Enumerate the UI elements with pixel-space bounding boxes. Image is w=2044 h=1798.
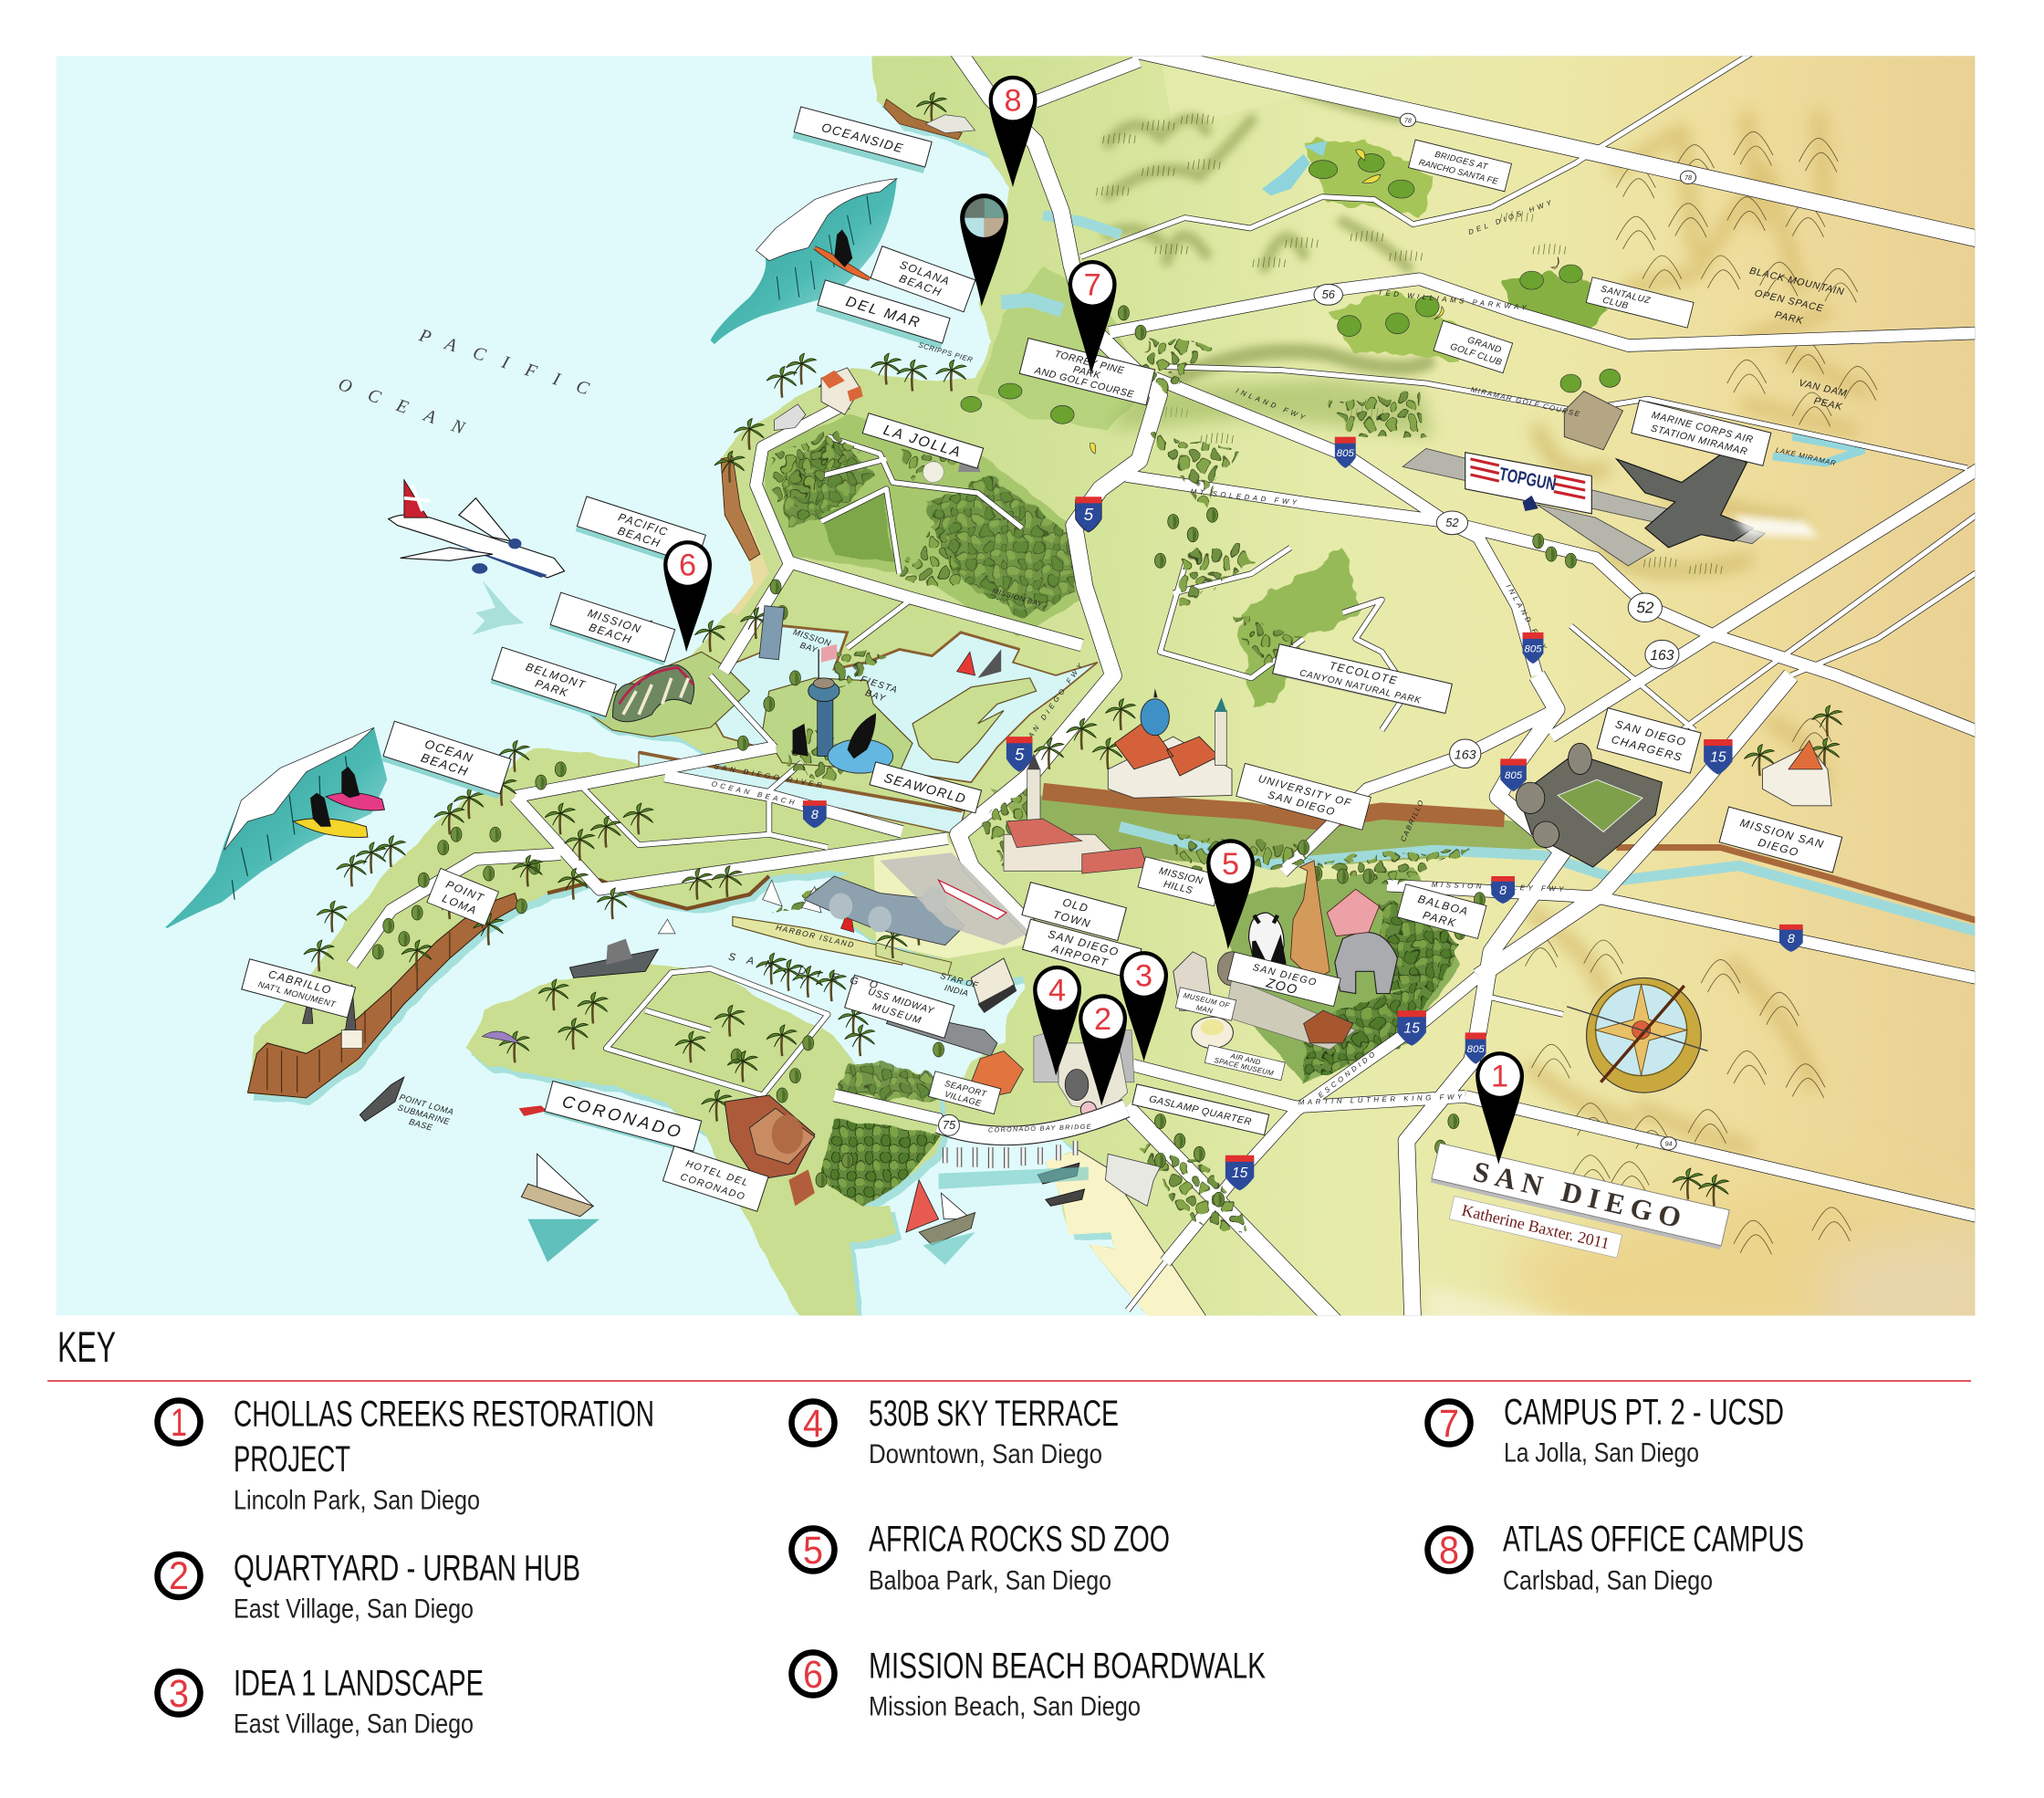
shield: I-805 mid: 805	[1524, 643, 1542, 654]
key item 7: La Jolla, San Diego	[1504, 1438, 1699, 1468]
map pins	[663, 76, 1524, 1165]
pin 2	[1079, 994, 1127, 1105]
label: Solana Beach: SOLANA	[898, 258, 952, 288]
Industrial plant near bridge	[1105, 1154, 1160, 1206]
label: Point Loma submarine base: POINT LOMA	[399, 1092, 454, 1117]
text: place names on land: LAKE MIRAMAR	[1775, 445, 1837, 467]
Mission San Diego buildings	[1762, 740, 1831, 806]
text: road names: SAN DIEGO FWY	[1022, 660, 1086, 746]
panel: key column 2	[792, 1394, 1266, 1721]
route numbers: 163	[1650, 648, 1674, 664]
label: Torrey Pine: PARK	[1072, 364, 1102, 382]
label: San Diego main title: SAN DIEGO	[1470, 1155, 1691, 1236]
label: University of San Diego	[1236, 763, 1371, 830]
shield: I-15 zoo	[1397, 1010, 1426, 1046]
route numbers: 75	[943, 1118, 956, 1132]
label: Pacific Beach	[576, 497, 705, 570]
shield: I-5 south	[1006, 737, 1032, 772]
shield: I-8 west	[803, 800, 827, 828]
label: San Diego Airport	[1023, 919, 1142, 979]
key item 6: 6	[803, 1653, 823, 1697]
label: Grand Golf Club: GOLF CLUB	[1449, 342, 1503, 368]
key item 3	[157, 1663, 484, 1740]
location labels	[242, 107, 1849, 1258]
label: USS Midway Museum	[845, 975, 954, 1038]
label: Marine Corps Air Station	[1632, 400, 1771, 465]
University of San Diego campus	[1004, 688, 1232, 873]
panel: key column 1	[157, 1395, 654, 1740]
shield: I-15 east: 15	[1710, 749, 1726, 765]
land mass with coastal shadow	[247, 39, 2007, 1350]
water: Mission Bay	[584, 626, 1098, 834]
shield: I-805 south	[1465, 1032, 1486, 1064]
sailboats and ships	[360, 649, 1085, 1265]
key item 1: PROJECT	[234, 1439, 350, 1479]
shield: I-805 stadium: 805	[1505, 770, 1523, 781]
shield: I-8 west: 8	[811, 808, 819, 822]
key item 5: Balboa Park, San Diego	[869, 1566, 1111, 1595]
label: Cabrillo	[242, 959, 356, 1018]
text: place names on land: SCRIPPS PIER	[917, 340, 974, 364]
text: place names on land: OPEN SPACE	[1754, 287, 1825, 314]
label: Point Loma submarine base	[392, 1092, 454, 1137]
text: place names on land: BLACK MOUNTAIN	[1748, 266, 1845, 298]
text: road names: MISSION VALLEY FWY	[1432, 881, 1567, 894]
label: Marine Corps Air Station: STATION MIRAMAR	[1650, 423, 1749, 457]
shield: I-5 north	[1076, 497, 1101, 532]
pin 2: 2	[1094, 1002, 1111, 1037]
pin 8: 8	[1004, 83, 1022, 118]
label: Gaslamp Quarter	[1132, 1084, 1269, 1135]
text: road names: SAN DIEGO	[727, 952, 890, 994]
key heading: KEY	[57, 1322, 116, 1371]
label: Grand Golf Club: GRAND	[1466, 335, 1503, 356]
label: Ocean Beach	[381, 721, 511, 799]
label: San Diego Zoo: ZOO	[1264, 976, 1299, 998]
road network	[352, 46, 1995, 1330]
text: place names on land: VAN DAM	[1798, 378, 1849, 400]
label: Hotel Del Coronado: CORONADO	[679, 1172, 747, 1203]
fiesta island	[912, 678, 1037, 763]
shield: I-805 stadium	[1500, 758, 1527, 791]
label: Star of India	[936, 971, 980, 1000]
label: Coronado	[544, 1081, 702, 1154]
label: Point Loma: POINT	[444, 878, 486, 904]
label: Mission San Diego: DIEGO	[1757, 836, 1800, 859]
Coronado Bay Bridge	[939, 1108, 1126, 1189]
label: Tecolote: CANYON NATURAL PARK	[1298, 668, 1423, 706]
shield: I-15 south	[1225, 1155, 1254, 1190]
label: Mission Hills: HILLS	[1163, 879, 1194, 896]
label: University of San Diego: SAN DIEGO	[1267, 789, 1337, 819]
label: San Diego Zoo: SAN DIEGO	[1252, 962, 1319, 988]
pin 3: 3	[1135, 959, 1152, 994]
text: road names: DEL DIOS HWY	[1467, 197, 1556, 236]
key item 6: Mission Beach, San Diego	[869, 1692, 1141, 1721]
label: Old Town: OLD	[1061, 895, 1090, 915]
panel: illustrated map of San Diego	[56, 39, 2007, 1350]
label: Tecolote: TECOLOTE	[1328, 659, 1399, 687]
pin 5	[1206, 839, 1255, 949]
text: road names	[711, 197, 1567, 1106]
label: Bridges at Rancho Santa Fe: RANCHO SANTA FE	[1418, 158, 1499, 186]
key item 6	[792, 1646, 1266, 1721]
text: Pacific Ocean	[336, 325, 609, 444]
label: Mission Hills: MISSION	[1158, 865, 1204, 887]
label: La Jolla: LA JOLLA	[881, 423, 964, 461]
pin 1: 1	[1491, 1060, 1508, 1094]
label: Cabrillo: NAT'L MONUMENT	[257, 979, 338, 1009]
Hotel del Coronado	[483, 1031, 815, 1206]
highway shields	[803, 113, 1803, 1190]
route numbers: 78	[1404, 117, 1412, 124]
shield: I-15 zoo: 15	[1403, 1020, 1420, 1036]
golf course dots and flags	[961, 150, 1621, 454]
label: Point Loma: LOMA	[441, 892, 479, 917]
route numbers: 52	[1636, 598, 1654, 616]
Belmont Park roller coaster	[612, 665, 694, 722]
label: Marine Corps Air Station: MARINE CORPS AIR	[1651, 410, 1755, 445]
label: SeaWorld: SEAWORLD	[882, 771, 968, 807]
route numbers: 56	[1322, 287, 1336, 301]
compass rose	[1567, 977, 1707, 1092]
route markers	[939, 113, 1696, 1150]
label: Bridges at Rancho Santa Fe: BRIDGES AT	[1434, 150, 1489, 172]
shield: I-805 south: 805	[1467, 1044, 1485, 1055]
shield: I-15 south: 15	[1232, 1166, 1248, 1181]
label: San Diego Airport: SAN DIEGO	[1047, 927, 1121, 959]
label: Solana Beach	[871, 246, 975, 312]
text: road names: SAN DIEGO RIVER	[714, 762, 826, 790]
key item 7: 7	[1439, 1402, 1459, 1446]
key item 2: QUARTYARD - URBAN HUB	[234, 1548, 580, 1588]
label: San Diego main title	[1431, 1144, 1729, 1249]
label: Seaport Village: VILLAGE	[944, 1090, 983, 1108]
brown canyon cliffs	[1043, 791, 1995, 925]
pin 8	[989, 76, 1037, 187]
label: San Diego Zoo	[1227, 952, 1340, 1008]
label: Pacific Beach: PACIFIC	[617, 510, 670, 538]
key item 1: Lincoln Park, San Diego	[234, 1486, 480, 1515]
key item 4: Downtown, San Diego	[869, 1439, 1102, 1469]
text: road names: TED WILLIAMS PARKWAY	[1378, 288, 1530, 312]
label: USS Midway Museum: MUSEUM	[871, 1001, 923, 1027]
ocean background	[57, 57, 1148, 1316]
pin 7: 7	[1084, 268, 1101, 303]
label: Seaport Village: SEAPORT	[944, 1079, 988, 1099]
pin 3	[1120, 951, 1168, 1061]
Seaport Village roofs	[971, 1051, 1023, 1098]
text: road names: OCEAN BEACH FWY	[711, 779, 829, 814]
label: La Jolla	[862, 413, 984, 468]
label: University of San Diego: UNIVERSITY OF	[1257, 774, 1353, 810]
Coronado Bay Bridge: CORONADO BAY BRIDGE	[988, 1124, 1092, 1134]
label: Harbor Island: HARBOR ISLAND	[775, 923, 856, 949]
key item 1	[157, 1395, 654, 1515]
route numbers: 78	[1684, 174, 1692, 182]
label: Santaluz Club: CLUB	[1601, 296, 1630, 311]
cliffs: Point Loma and Cabrillo	[247, 99, 962, 1098]
label: Torrey Pine: AND GOLF COURSE	[1033, 365, 1135, 401]
key divider line	[47, 1380, 1971, 1382]
label: Del Mar: DEL MAR	[844, 294, 923, 331]
shield: I-805 mid	[1523, 632, 1543, 664]
tree clusters	[372, 306, 1576, 1239]
pin blank quadrant	[960, 193, 1008, 307]
pin 6: 6	[679, 549, 696, 583]
text: place names on land: PARK	[1774, 309, 1805, 327]
label: Torrey Pine: TORREY PINE	[1053, 349, 1126, 377]
shaded hills	[1108, 91, 1864, 1147]
text: road names: INLAND FWY	[1505, 583, 1550, 653]
shield: I-8 east	[1779, 925, 1803, 952]
green park zones	[763, 141, 1610, 1206]
text: Pacific Ocean: OCEAN	[336, 374, 485, 444]
label: Fiesta Bay	[856, 674, 900, 707]
route numbers: 52	[1445, 516, 1459, 529]
label: Mission Bay: BAY	[799, 641, 819, 654]
label: Coronado: CORONADO	[560, 1092, 685, 1142]
seaworld island	[763, 678, 912, 772]
rivers and lagoons	[1001, 215, 1995, 936]
label: Air and Space Museum: SPACE MUSEUM	[1214, 1056, 1275, 1078]
label: Star of India: STAR OF	[939, 971, 980, 990]
label: Belmont Park: PARK	[534, 677, 570, 700]
wave with surfers: Ocean Beach	[165, 727, 387, 928]
label: Belmont Park	[491, 647, 616, 720]
label: artist signature: Katherine Baxter. 2011	[1460, 1201, 1611, 1252]
label: Mission San Diego: MISSION SAN	[1738, 816, 1826, 851]
label: Grand Golf Club	[1434, 320, 1513, 373]
label: Bridges at Rancho Santa Fe	[1409, 140, 1511, 192]
label: Point Loma submarine base: SUBMARINE	[397, 1103, 451, 1126]
label: Mission Beach: MISSION	[586, 607, 643, 636]
text: place names on land: MISSION BAY	[991, 587, 1044, 609]
route numbers: 94	[1665, 1141, 1673, 1148]
label: Hotel Del Coronado	[662, 1146, 768, 1211]
panel: key column 3	[1427, 1393, 1804, 1595]
key item 1: 1	[171, 1401, 187, 1445]
key item 3: 3	[169, 1672, 189, 1716]
key item 8: 8	[1439, 1529, 1459, 1573]
shield: I-5 north: 5	[1084, 505, 1094, 524]
key item 3: East Village, San Diego	[234, 1709, 474, 1740]
label: San Diego Chargers	[1597, 708, 1701, 773]
label: Mission Beach	[549, 592, 675, 665]
key item 5	[792, 1519, 1170, 1595]
label: USS Midway Museum: USS MIDWAY	[867, 987, 935, 1017]
pin 6	[663, 540, 712, 652]
label: Balboa Park: BALBOA	[1416, 893, 1470, 918]
label: Balboa Park	[1397, 884, 1486, 938]
mountain hatching	[1096, 113, 1877, 1254]
Airport terminal and jet	[804, 852, 1030, 946]
key item 1: CHOLLAS CREEKS RESTORATION	[234, 1395, 654, 1435]
label: Museum of Man	[1175, 988, 1236, 1020]
pin 4: 4	[1048, 973, 1066, 1008]
label: Ocean Beach: OCEAN	[423, 737, 475, 766]
key item 8	[1427, 1519, 1804, 1595]
key item 7	[1427, 1393, 1784, 1468]
text: road names: INLAND FWY	[1235, 386, 1309, 423]
text: road names: ESCONDIDO	[1317, 1049, 1379, 1100]
label: Mission San Diego	[1719, 807, 1842, 873]
key item 8: Carlsbad, San Diego	[1503, 1566, 1713, 1595]
label: Star of India: INDIA	[944, 983, 969, 998]
label: Oceanside	[792, 107, 932, 173]
label: Mission Beach: BEACH	[588, 621, 634, 646]
key item 4: 530B SKY TERRACE	[869, 1394, 1119, 1434]
label: Old Town	[1022, 883, 1126, 941]
San Diego Zoo animals and buildings	[1173, 861, 1397, 1050]
shield: I-5 south: 5	[1015, 745, 1025, 764]
text: place names on land: PEAK	[1813, 395, 1843, 413]
label: Mission Bay	[788, 627, 832, 658]
pin 5: 5	[1222, 847, 1239, 882]
key item 2: East Village, San Diego	[234, 1594, 474, 1625]
harbor island and marina water	[548, 876, 952, 976]
Qualcomm stadium	[1516, 743, 1662, 867]
key item 7: CAMPUS PT. 2 - UCSD	[1504, 1393, 1784, 1433]
text: place names on land: MIRAMAR GOLF COURSE	[1470, 385, 1581, 419]
Cabrillo monument and La Jolla buildings	[302, 115, 1327, 1049]
label: Solana Beach: BEACH	[898, 272, 944, 299]
label: Tecolote	[1272, 644, 1452, 715]
label: Seaport Village	[929, 1071, 1001, 1114]
key item 8: ATLAS OFFICE CAMPUS	[1503, 1519, 1804, 1559]
shield: I-8 east: 8	[1788, 932, 1795, 946]
text: road names: MT SOLEDAD FWY	[1190, 487, 1300, 507]
belmont park	[584, 652, 749, 737]
key item 3: IDEA 1 LANDSCAPE	[234, 1663, 484, 1703]
text: Pacific Ocean: PACIFIC	[416, 325, 609, 405]
Top Gun runway, sign and jet: TOPGUN	[1497, 465, 1558, 495]
label: Balboa Park: PARK	[1422, 908, 1458, 930]
label: Ocean Beach: BEACH	[419, 750, 470, 779]
label: San Diego Chargers: CHARGERS	[1610, 733, 1684, 764]
key item 4: 4	[803, 1402, 823, 1446]
label: Torrey Pine	[1019, 338, 1155, 405]
shield: I-15 east	[1704, 739, 1733, 775]
wave with surfer: Solana Beach	[711, 179, 897, 344]
key item 5: 5	[803, 1529, 823, 1573]
shield: I-805 north	[1335, 437, 1356, 468]
label: Point Loma	[427, 868, 498, 925]
label: Museum of Man: MUSEUM OF	[1183, 991, 1231, 1010]
airplane and shadow	[389, 480, 565, 635]
label: Santaluz Club: SANTALUZ	[1600, 284, 1652, 307]
route numbers: 163	[1455, 747, 1476, 762]
label: Air and Space Museum	[1204, 1045, 1285, 1081]
palm trees	[304, 92, 1842, 1206]
shield: I-8 valley	[1491, 876, 1515, 904]
label: San Diego Airport: AIRPORT	[1049, 942, 1111, 969]
route numbers	[943, 117, 1692, 1148]
key item 2	[157, 1548, 580, 1625]
label: SeaWorld	[870, 762, 982, 813]
label: Museum of Man: MAN	[1195, 1003, 1214, 1015]
key item 5: AFRICA ROCKS SD ZOO	[869, 1519, 1170, 1559]
key item 6: MISSION BEACH BOARDWALK	[869, 1646, 1266, 1687]
label: Oceanside: OCEANSIDE	[820, 120, 905, 155]
label: Hotel Del Coronado: HOTEL DEL	[684, 1158, 750, 1189]
label: Mission Hills	[1138, 857, 1222, 906]
USS Midway carrier	[886, 1010, 997, 1056]
label: Belmont Park: BELMONT	[524, 660, 588, 692]
pin 4	[1033, 966, 1081, 1076]
text: road names: MARTIN LUTHER KING FWY	[1298, 1092, 1465, 1106]
shield: I-8 valley: 8	[1499, 883, 1507, 898]
text: road names: CABRILLO	[1399, 798, 1425, 843]
label: Old Town: TOWN	[1051, 908, 1092, 930]
pin 1	[1476, 1051, 1524, 1165]
text: place names on land	[917, 266, 1849, 609]
SeaWorld tower, orca and pool	[793, 644, 893, 773]
pin 7	[1069, 260, 1117, 374]
label: Air and Space Museum: AIR AND	[1229, 1051, 1262, 1067]
Top Gun runway, sign and jet	[1403, 392, 1819, 566]
label: Pacific Beach: BEACH	[616, 524, 662, 550]
key item 4	[792, 1394, 1119, 1469]
label: Gaslamp Quarter: GASLAMP QUARTER	[1148, 1093, 1253, 1128]
label: Fiesta Bay: BAY	[864, 688, 887, 705]
shield: I-805 north: 805	[1337, 448, 1354, 459]
label: Mission Bay: MISSION	[792, 627, 832, 648]
key item 2: 2	[169, 1554, 189, 1598]
label: Point Loma submarine base: BASE	[408, 1117, 434, 1133]
Downtown towers and plaza	[1034, 1030, 1134, 1117]
label: Santaluz Club	[1586, 277, 1694, 328]
label: Cabrillo: CABRILLO	[267, 967, 333, 997]
label: Del Mar	[816, 280, 950, 350]
label: San Diego Chargers: SAN DIEGO	[1614, 717, 1688, 749]
label: Fiesta Bay: FIESTA	[859, 674, 900, 696]
